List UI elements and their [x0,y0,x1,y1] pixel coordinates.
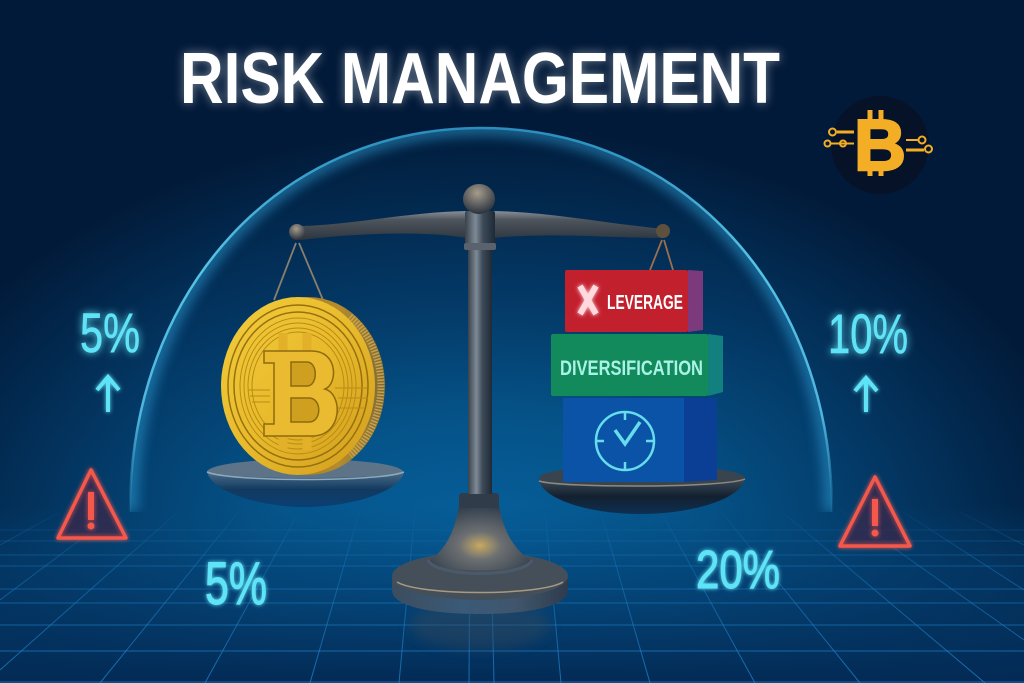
right pan [539,479,745,514]
left warning triangle [58,470,126,538]
right strings [650,240,673,270]
post [468,250,492,494]
right up arrow [855,378,877,412]
logo: bitcoin circuit badge [824,96,932,194]
base [392,493,568,649]
icon: clock [596,412,654,470]
right indicators [828,302,910,546]
block: leverage (red) [565,270,703,332]
left strings [274,243,323,300]
block: leverage (red): LEVERAGE [607,292,683,314]
right warning triangle [840,477,910,546]
right pivot [656,224,670,238]
left pivot [289,224,305,240]
perspective floor grid [0,505,1024,683]
bottom right 20%: 20% [696,540,780,600]
block: diversification (green) [551,334,723,396]
block: diversification (green): DIVERSIFICATION [560,357,703,380]
left up arrow [97,377,119,412]
finial ball [463,184,495,214]
left pan back [207,459,403,485]
title: RISK MANAGEMENT [180,39,780,119]
right percent 10%: 10% [828,302,908,365]
post collar [465,211,495,245]
bitcoin coin [221,297,385,475]
icon: red x [580,286,596,314]
left indicators [58,301,140,538]
balance scale [274,184,673,649]
logo: bitcoin circuit badge: B [854,106,906,186]
bottom left 5%: 5% [205,550,267,617]
bitcoin symbol [264,333,337,450]
left percent 5%: 5% [80,301,140,364]
right pan back [539,465,745,491]
left pan [207,472,404,507]
block: time (blue) [563,398,717,482]
dome arc [130,128,832,512]
beam [300,211,664,240]
